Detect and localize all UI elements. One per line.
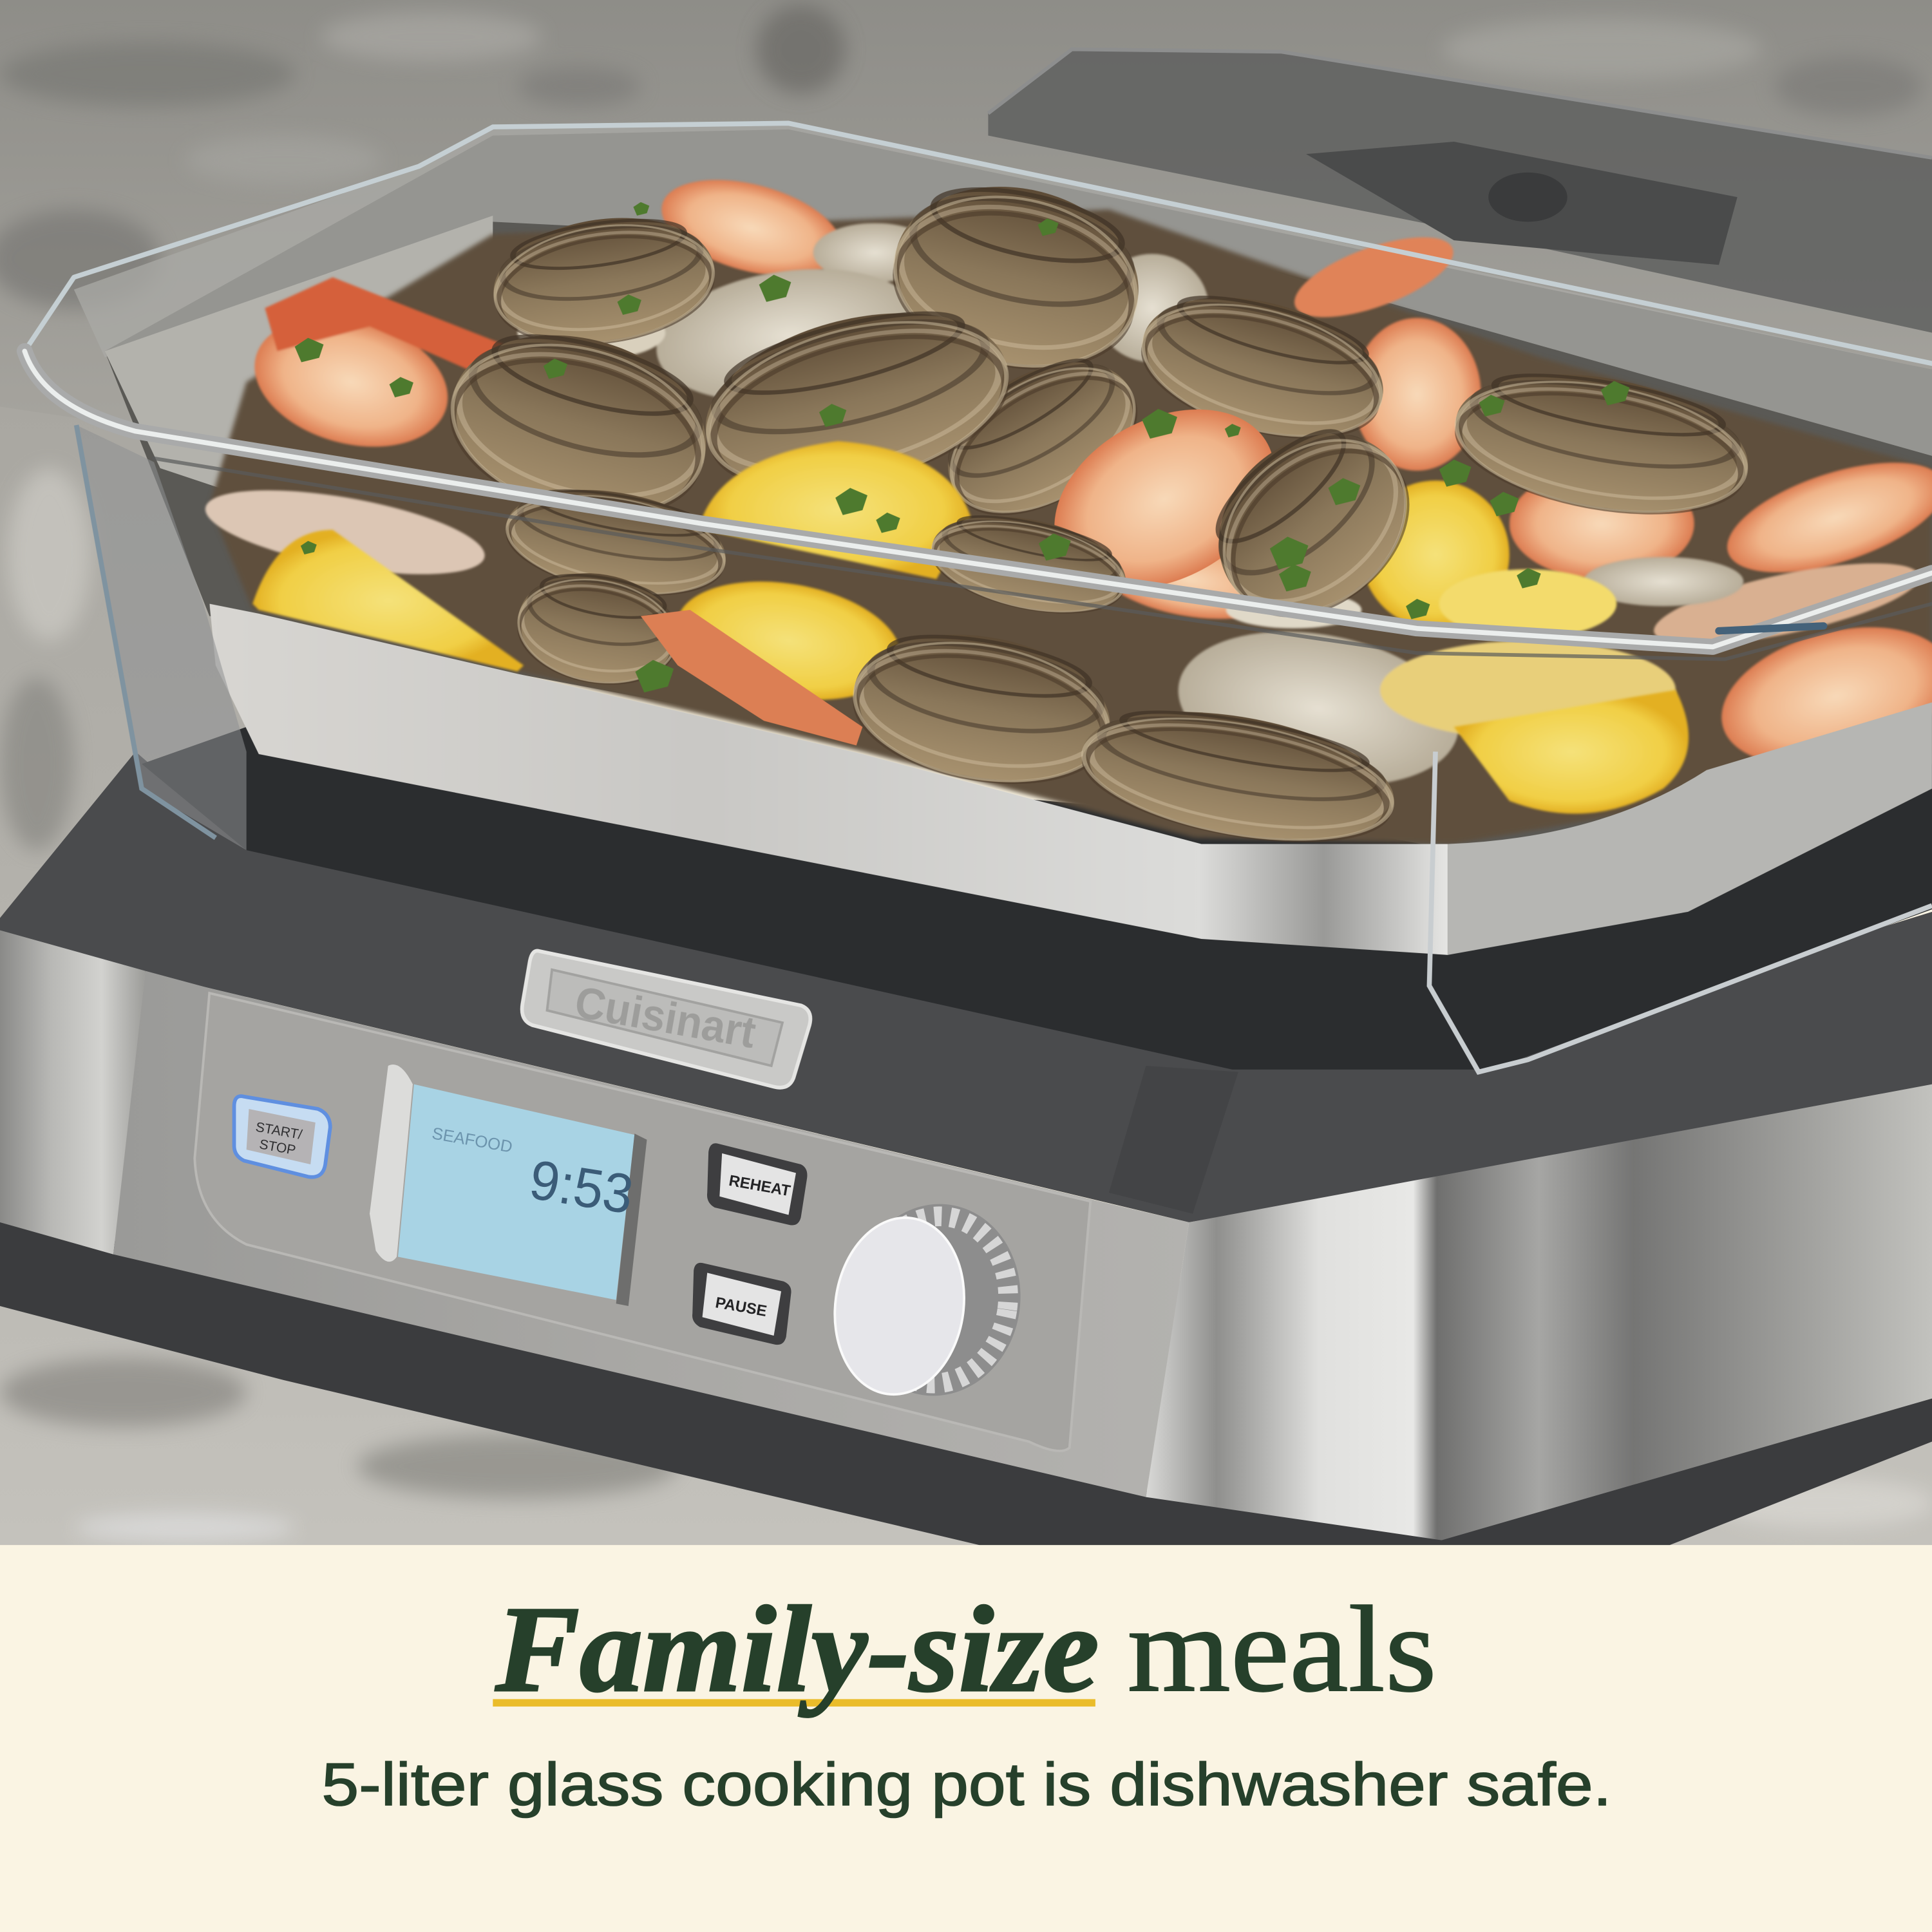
wall and counter mottling	[0, 5, 1932, 1542]
pot glass rim	[24, 123, 1932, 659]
start/stop button: STOP	[258, 1137, 297, 1158]
glass left interior	[105, 216, 493, 493]
steel cooking tray	[209, 604, 1448, 955]
pot glass front	[77, 425, 1932, 1072]
base: left steel band	[0, 931, 146, 1255]
LCD display: SEAFOOD	[431, 1124, 514, 1157]
housing trim	[1109, 1066, 1238, 1214]
heading: Family-size meals: Family-size	[495, 1582, 1099, 1718]
interior glass wall	[74, 123, 1932, 456]
white clam shells	[518, 223, 1743, 806]
LCD display: 9:53	[526, 1149, 638, 1226]
heading: Family-size meals	[495, 1582, 1437, 1718]
clams	[486, 205, 722, 357]
lemon slices	[252, 441, 1689, 814]
parsley flecks	[295, 202, 1629, 692]
heading underline	[493, 1699, 1095, 1707]
shrimp back	[200, 162, 1932, 788]
reheat button: REHEAT	[728, 1172, 792, 1200]
shrimp tail	[641, 610, 862, 746]
tray right side	[1448, 703, 1932, 955]
food pile	[200, 162, 1932, 862]
base: right steel band	[1146, 1084, 1932, 1540]
background wall	[0, 0, 1932, 468]
base: dark lower housing	[0, 1214, 1932, 1545]
pause button: PAUSE	[714, 1294, 768, 1320]
start/stop button: START/	[254, 1120, 303, 1142]
base: control panel steel	[113, 971, 1189, 1497]
LCD display	[370, 1065, 647, 1306]
logo badge	[522, 951, 810, 1088]
pause button	[692, 1263, 791, 1345]
countertop	[0, 406, 1932, 1545]
dark recess under pot	[142, 690, 1932, 1070]
food underlayer	[209, 209, 1932, 844]
reheat button	[707, 1143, 807, 1226]
center shrimp	[1023, 374, 1305, 625]
subheading: 5-liter glass cooking pot is dishwasher safe.	[321, 1750, 1612, 1818]
logo badge: Cuisinart	[571, 977, 759, 1057]
base: dark top housing	[0, 752, 1932, 1222]
front clams	[1182, 397, 1442, 651]
start/stop button	[234, 1096, 330, 1177]
inset panel	[194, 993, 1090, 1451]
heading: Family-size meals: meals	[1128, 1582, 1437, 1718]
clear lid in background	[988, 50, 1932, 333]
caption panel	[0, 1545, 1932, 1932]
steamer pot interior	[105, 129, 1932, 850]
control dial	[824, 1193, 1033, 1406]
